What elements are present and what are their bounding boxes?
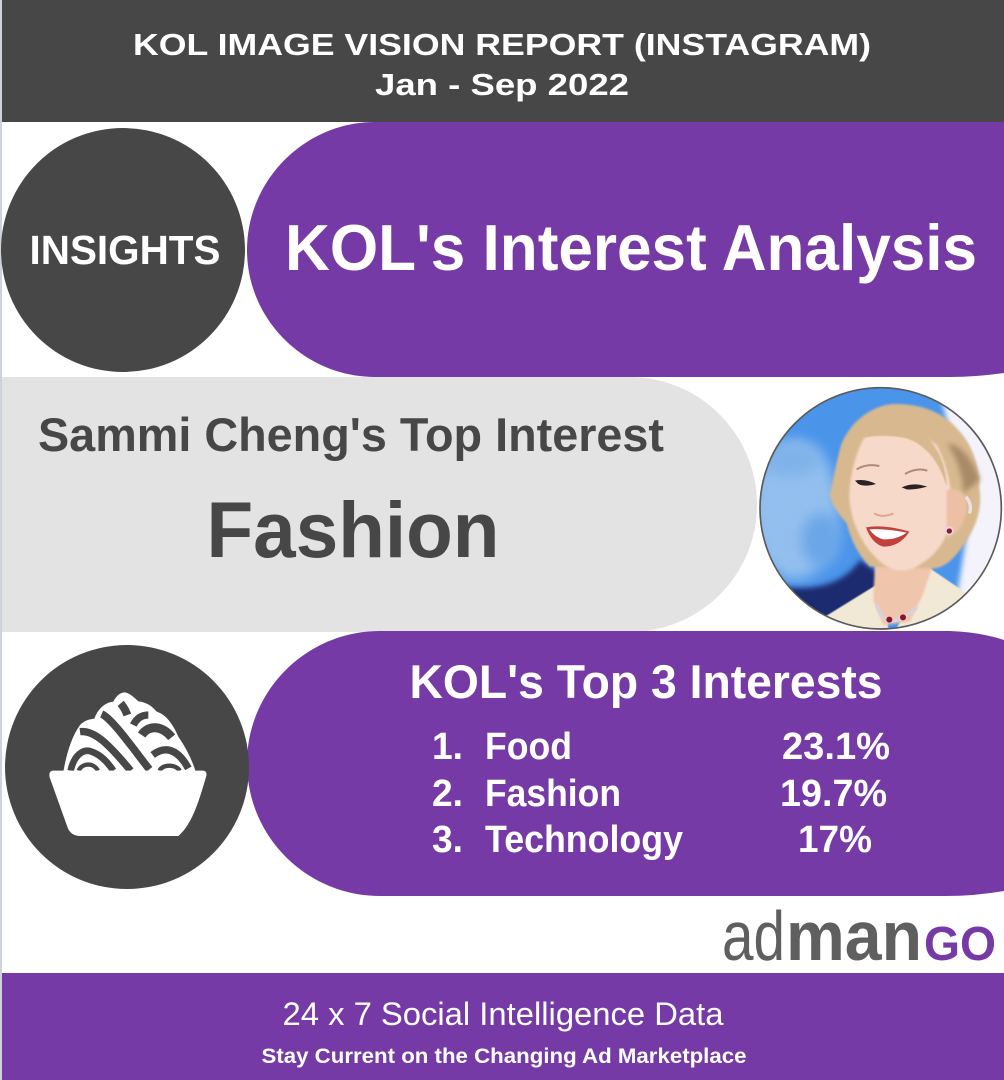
row: fashion: 2. bbox=[432, 773, 463, 815]
fringe bbox=[862, 427, 947, 487]
row: fashion: Fashion bbox=[485, 773, 621, 815]
insights circle bbox=[1, 128, 245, 372]
mouth bbox=[866, 526, 909, 547]
footer subline: Stay Current on the Changing Ad Marketplace bbox=[262, 1045, 746, 1068]
top 3 heading: KOL's Top 3 Interests bbox=[410, 655, 882, 708]
neck bbox=[872, 565, 933, 626]
heading text: KOL's Interest Analysis bbox=[285, 211, 977, 284]
header date: Jan - Sep 2022 bbox=[375, 67, 629, 102]
top interest subtitle: Sammi Cheng's Top Interest bbox=[38, 408, 664, 461]
header band bbox=[2, 0, 1004, 122]
row: fashion: 19.7% bbox=[780, 773, 887, 815]
row: food: 1. bbox=[432, 726, 463, 768]
row: technology bbox=[432, 819, 872, 861]
face bbox=[849, 431, 952, 571]
jacket bbox=[826, 568, 966, 628]
row: food bbox=[432, 726, 890, 768]
row: fashion bbox=[432, 773, 887, 815]
admango logo: ad bbox=[722, 897, 785, 975]
earrings bbox=[945, 526, 954, 535]
row: technology: 17% bbox=[798, 819, 872, 861]
necklace bbox=[877, 604, 917, 621]
top interest value: Fashion bbox=[206, 485, 500, 574]
header title: KOL IMAGE VISION REPORT (INSTAGRAM) bbox=[133, 27, 871, 62]
footer band bbox=[2, 973, 1004, 1080]
panel: top 3 interests bbox=[247, 631, 1004, 896]
admango logo: man bbox=[786, 897, 922, 975]
row: technology: Technology bbox=[485, 819, 683, 861]
portrait photo bbox=[752, 380, 1004, 640]
panel: interest analysis heading bbox=[247, 122, 1004, 377]
bowl circle bbox=[5, 645, 249, 889]
panel: top interest bbox=[2, 377, 757, 632]
admango logo bbox=[722, 897, 996, 975]
row: food: Food bbox=[485, 726, 572, 768]
row: food: 23.1% bbox=[782, 726, 890, 768]
footer tagline: 24 x 7 Social Intelligence Data bbox=[282, 996, 724, 1032]
brows bbox=[857, 465, 927, 474]
eyes bbox=[855, 480, 927, 489]
hair bbox=[830, 404, 980, 568]
admango logo: GO bbox=[924, 918, 996, 971]
insights label: INSIGHTS bbox=[30, 227, 220, 273]
nose bbox=[874, 513, 893, 516]
icon: noodle bowl bbox=[49, 692, 207, 836]
row: technology: 3. bbox=[432, 819, 463, 861]
